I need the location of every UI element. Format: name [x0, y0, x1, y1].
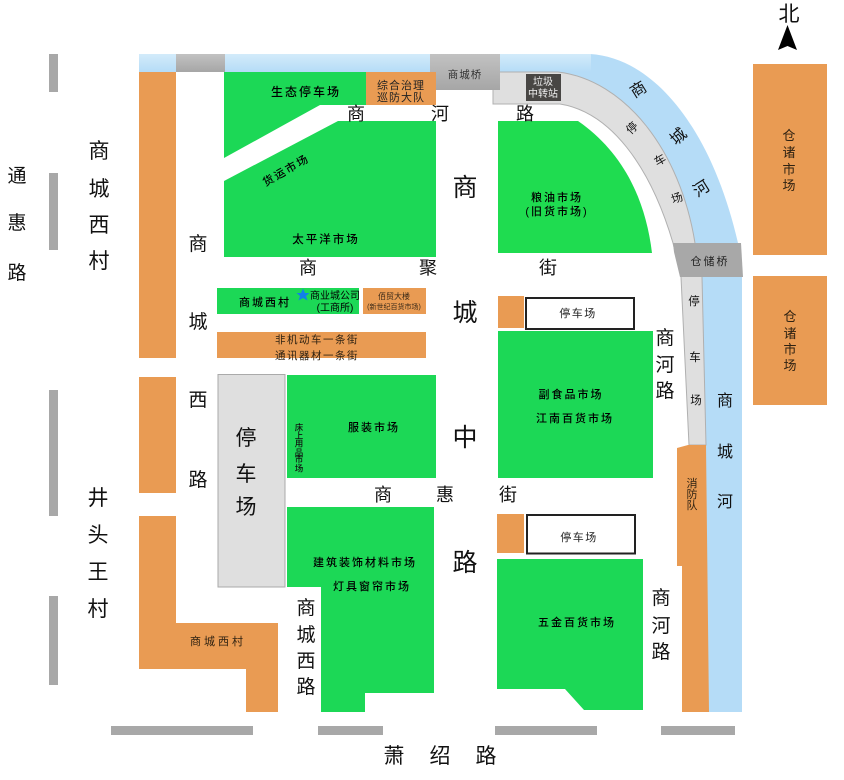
label: 商城中路: 商	[452, 174, 478, 202]
label: 商城西路 south: 西	[296, 651, 316, 672]
market: 服装市场	[287, 375, 436, 478]
label: 商城中路: 城	[452, 299, 478, 327]
label: 通惠路: 路	[7, 262, 27, 284]
label: 通惠路	[7, 165, 27, 284]
market: 商城西村 row: 商业城公司	[310, 289, 360, 302]
river label: 河	[717, 493, 733, 511]
parking: west large: 停	[236, 427, 256, 450]
bridge: 商城桥: 商城桥	[448, 68, 482, 81]
label: 萧绍路: 绍	[430, 745, 450, 768]
parking: west large: 车	[236, 463, 256, 486]
parking strip label: 停	[623, 119, 641, 137]
label: 萧绍路: 萧	[384, 745, 404, 768]
garbage transfer station: 中转站	[528, 87, 558, 100]
bridge: left unnamed	[176, 54, 225, 72]
parking strip label: 车	[689, 350, 701, 364]
label: 商河路 mid: 路	[655, 380, 675, 402]
orange: street strip	[217, 332, 426, 362]
river label: 商	[717, 392, 733, 410]
label: 商惠街	[374, 485, 517, 505]
bridge: 仓储桥	[673, 243, 743, 277]
label: 床上用品市场: 床	[295, 422, 304, 432]
orange: 消防队: 防	[686, 487, 698, 501]
orange: 仓诸市场 north: 仓	[782, 128, 796, 143]
orange: 仓诸市场 north: 场	[782, 178, 796, 193]
orange: 消防队	[677, 445, 709, 712]
river label: 城	[717, 443, 733, 461]
label: 床上用品市场: 市	[295, 454, 304, 464]
market: 粮油市场: (旧货市场)	[525, 204, 589, 218]
orange: 仓诸市场 south: 诸	[783, 326, 797, 341]
market: 生态停车场: 生态停车场	[271, 84, 341, 99]
label: 萧绍路	[384, 745, 496, 768]
parking strip label: 场	[669, 189, 685, 207]
north arrow: 北	[778, 3, 800, 26]
label: 商河路 mid: 河	[655, 354, 675, 376]
label: 床上用品市场: 场	[295, 464, 304, 474]
label: 商河路 top: 商	[347, 104, 365, 124]
label: 床上用品市场: 用	[295, 438, 303, 448]
market: 太平洋市场: 货运市场	[260, 151, 312, 189]
label: 商城西村: 城	[88, 178, 110, 201]
parking strip label: 车	[652, 151, 668, 169]
market: 五金百货市场	[497, 559, 643, 710]
label: 商城中路: 中	[452, 424, 478, 452]
label: 商城西村	[88, 140, 110, 273]
orange: 消防队: 消	[686, 476, 698, 490]
label: 商河路 south: 河	[651, 615, 671, 637]
label: 商城中路: 路	[452, 549, 478, 577]
label: 商河路 mid: 商	[655, 327, 675, 349]
bridge: 仓储桥: 仓储桥	[690, 254, 730, 268]
label: 床上用品市场: 上	[295, 430, 304, 440]
label: 商城西路 north: 西	[188, 390, 208, 411]
orange: 佰贸大楼: (新世纪百货市场)	[367, 302, 421, 311]
label: 商惠街: 街	[499, 485, 517, 505]
icon: star	[296, 288, 310, 300]
orange: 综合治理巡防大队: 巡防大队	[377, 90, 425, 104]
label: 商惠街: 惠	[436, 485, 454, 505]
north arrow	[778, 3, 800, 50]
market: 副食品市场: 副食品市场	[538, 387, 604, 401]
label: 商城西路 north: 商	[188, 233, 208, 255]
gray road bars	[49, 54, 735, 735]
orange: 仓诸市场 south: 市	[783, 342, 797, 357]
river label	[627, 78, 733, 511]
label: 床上用品市场: 品	[295, 448, 303, 458]
label: 井头王村	[88, 487, 108, 621]
orange: 综合治理巡防大队	[366, 72, 436, 105]
parking strip label	[623, 119, 702, 407]
parking: south box: 停车场	[560, 530, 598, 544]
label: 商城西路 north: 路	[188, 469, 208, 491]
label: 商河路 top: 路	[516, 104, 534, 124]
label: 商河路 mid	[655, 327, 675, 402]
label: 商河路 south: 商	[651, 587, 671, 609]
orange: small lot north	[498, 296, 524, 328]
label: 商城西村 south: 商城西村	[190, 634, 246, 648]
parking: west large: 场	[236, 496, 256, 519]
parking strip along river	[493, 72, 706, 445]
market: 商城西村 row: 商城西村	[239, 295, 291, 309]
orange: 仓诸市场 south	[753, 276, 827, 405]
label: 井头王村: 头	[88, 524, 108, 547]
orange: 商城西村 left columns	[139, 72, 278, 712]
market: 副食品市场	[498, 331, 653, 478]
orange: 仓诸市场 south: 场	[783, 358, 797, 373]
market: 粮油市场: 粮油市场	[531, 190, 583, 204]
market: 生态停车场	[224, 72, 366, 158]
label: 商城西路 north	[188, 233, 208, 491]
market: 建筑装饰材料	[287, 507, 434, 712]
river: 商城河	[139, 54, 742, 712]
label: 商聚街: 聚	[419, 258, 437, 278]
market: 商城西村 row: (工商所)	[317, 301, 353, 314]
orange: street strip: 通讯器材一条街	[275, 349, 359, 362]
label: 商河路 top: 河	[431, 104, 449, 124]
label: 商聚街: 商	[299, 258, 317, 278]
river label: 河	[690, 177, 713, 201]
parking: west large	[218, 374, 285, 587]
label: 商城西路 north: 城	[188, 311, 208, 333]
river label: 城	[667, 125, 691, 149]
market: 服装市场: 服装市场	[348, 420, 400, 434]
bridge: 商城桥	[430, 54, 500, 90]
label: 商聚街: 街	[539, 258, 557, 278]
parking: south box	[527, 515, 635, 554]
market: 副食品市场: 江南百货市场	[536, 411, 614, 425]
orange: 佰贸大楼: 佰贸大楼	[378, 291, 410, 301]
parking: north box	[526, 298, 634, 329]
label: 商城西路 south	[296, 597, 316, 698]
garbage transfer station: 垃圾	[533, 75, 553, 88]
label: 商城西路 south: 商	[296, 597, 316, 619]
label: 商河路 south: 路	[651, 641, 671, 663]
label: 通惠路: 惠	[7, 212, 27, 234]
label: 井头王村: 王	[88, 561, 108, 584]
market: 太平洋市场: 太平洋市场	[292, 232, 360, 246]
orange: 仓诸市场 north: 诸	[782, 145, 796, 160]
market: 建筑装饰材料: 灯具窗帘市场	[333, 579, 411, 593]
orange: 仓诸市场 south: 仓	[783, 309, 797, 324]
label: 商惠街: 商	[374, 485, 392, 505]
market: 建筑装饰材料: 建筑装饰材料市场	[313, 555, 417, 569]
orange: 仓诸市场 north: 市	[782, 162, 796, 177]
label: 萧绍路: 路	[476, 745, 496, 768]
label: 通惠路: 通	[7, 165, 27, 187]
orange: 仓诸市场 north	[753, 64, 827, 255]
market: 粮油市场	[498, 121, 652, 253]
parking strip label: 场	[690, 393, 702, 407]
label: 商聚街	[299, 258, 557, 278]
label: 井头王村: 村	[88, 598, 108, 621]
label: 商城西村: 商	[88, 140, 110, 163]
label: 商河路 top	[347, 104, 534, 124]
label: 商城西路 south: 城	[296, 624, 316, 646]
label: 商城西路 south: 路	[296, 676, 316, 698]
label: 商城西村: 村	[88, 250, 110, 273]
orange: 综合治理巡防大队: 综合治理	[377, 78, 425, 92]
orange: street strip: 非机动车一条街	[275, 333, 359, 346]
parking strip label: 停	[688, 294, 700, 308]
orange: small lot south	[497, 514, 524, 553]
garbage transfer station	[526, 74, 561, 101]
river label: 商	[627, 78, 650, 102]
market: 太平洋市场	[224, 121, 436, 257]
orange: 佰贸大楼	[363, 288, 426, 314]
market: 五金百货市场: 五金百货市场	[538, 615, 616, 629]
market: 商城西村 row	[217, 288, 360, 314]
orange: 消防队: 队	[686, 498, 698, 512]
label: 床上用品市场	[295, 422, 304, 474]
label: 商城中路	[452, 174, 478, 577]
label: 井头王村: 井	[88, 487, 108, 510]
label: 商城西村: 西	[88, 214, 110, 237]
label: 商河路 south	[651, 587, 671, 663]
parking: north box: 停车场	[559, 306, 597, 320]
